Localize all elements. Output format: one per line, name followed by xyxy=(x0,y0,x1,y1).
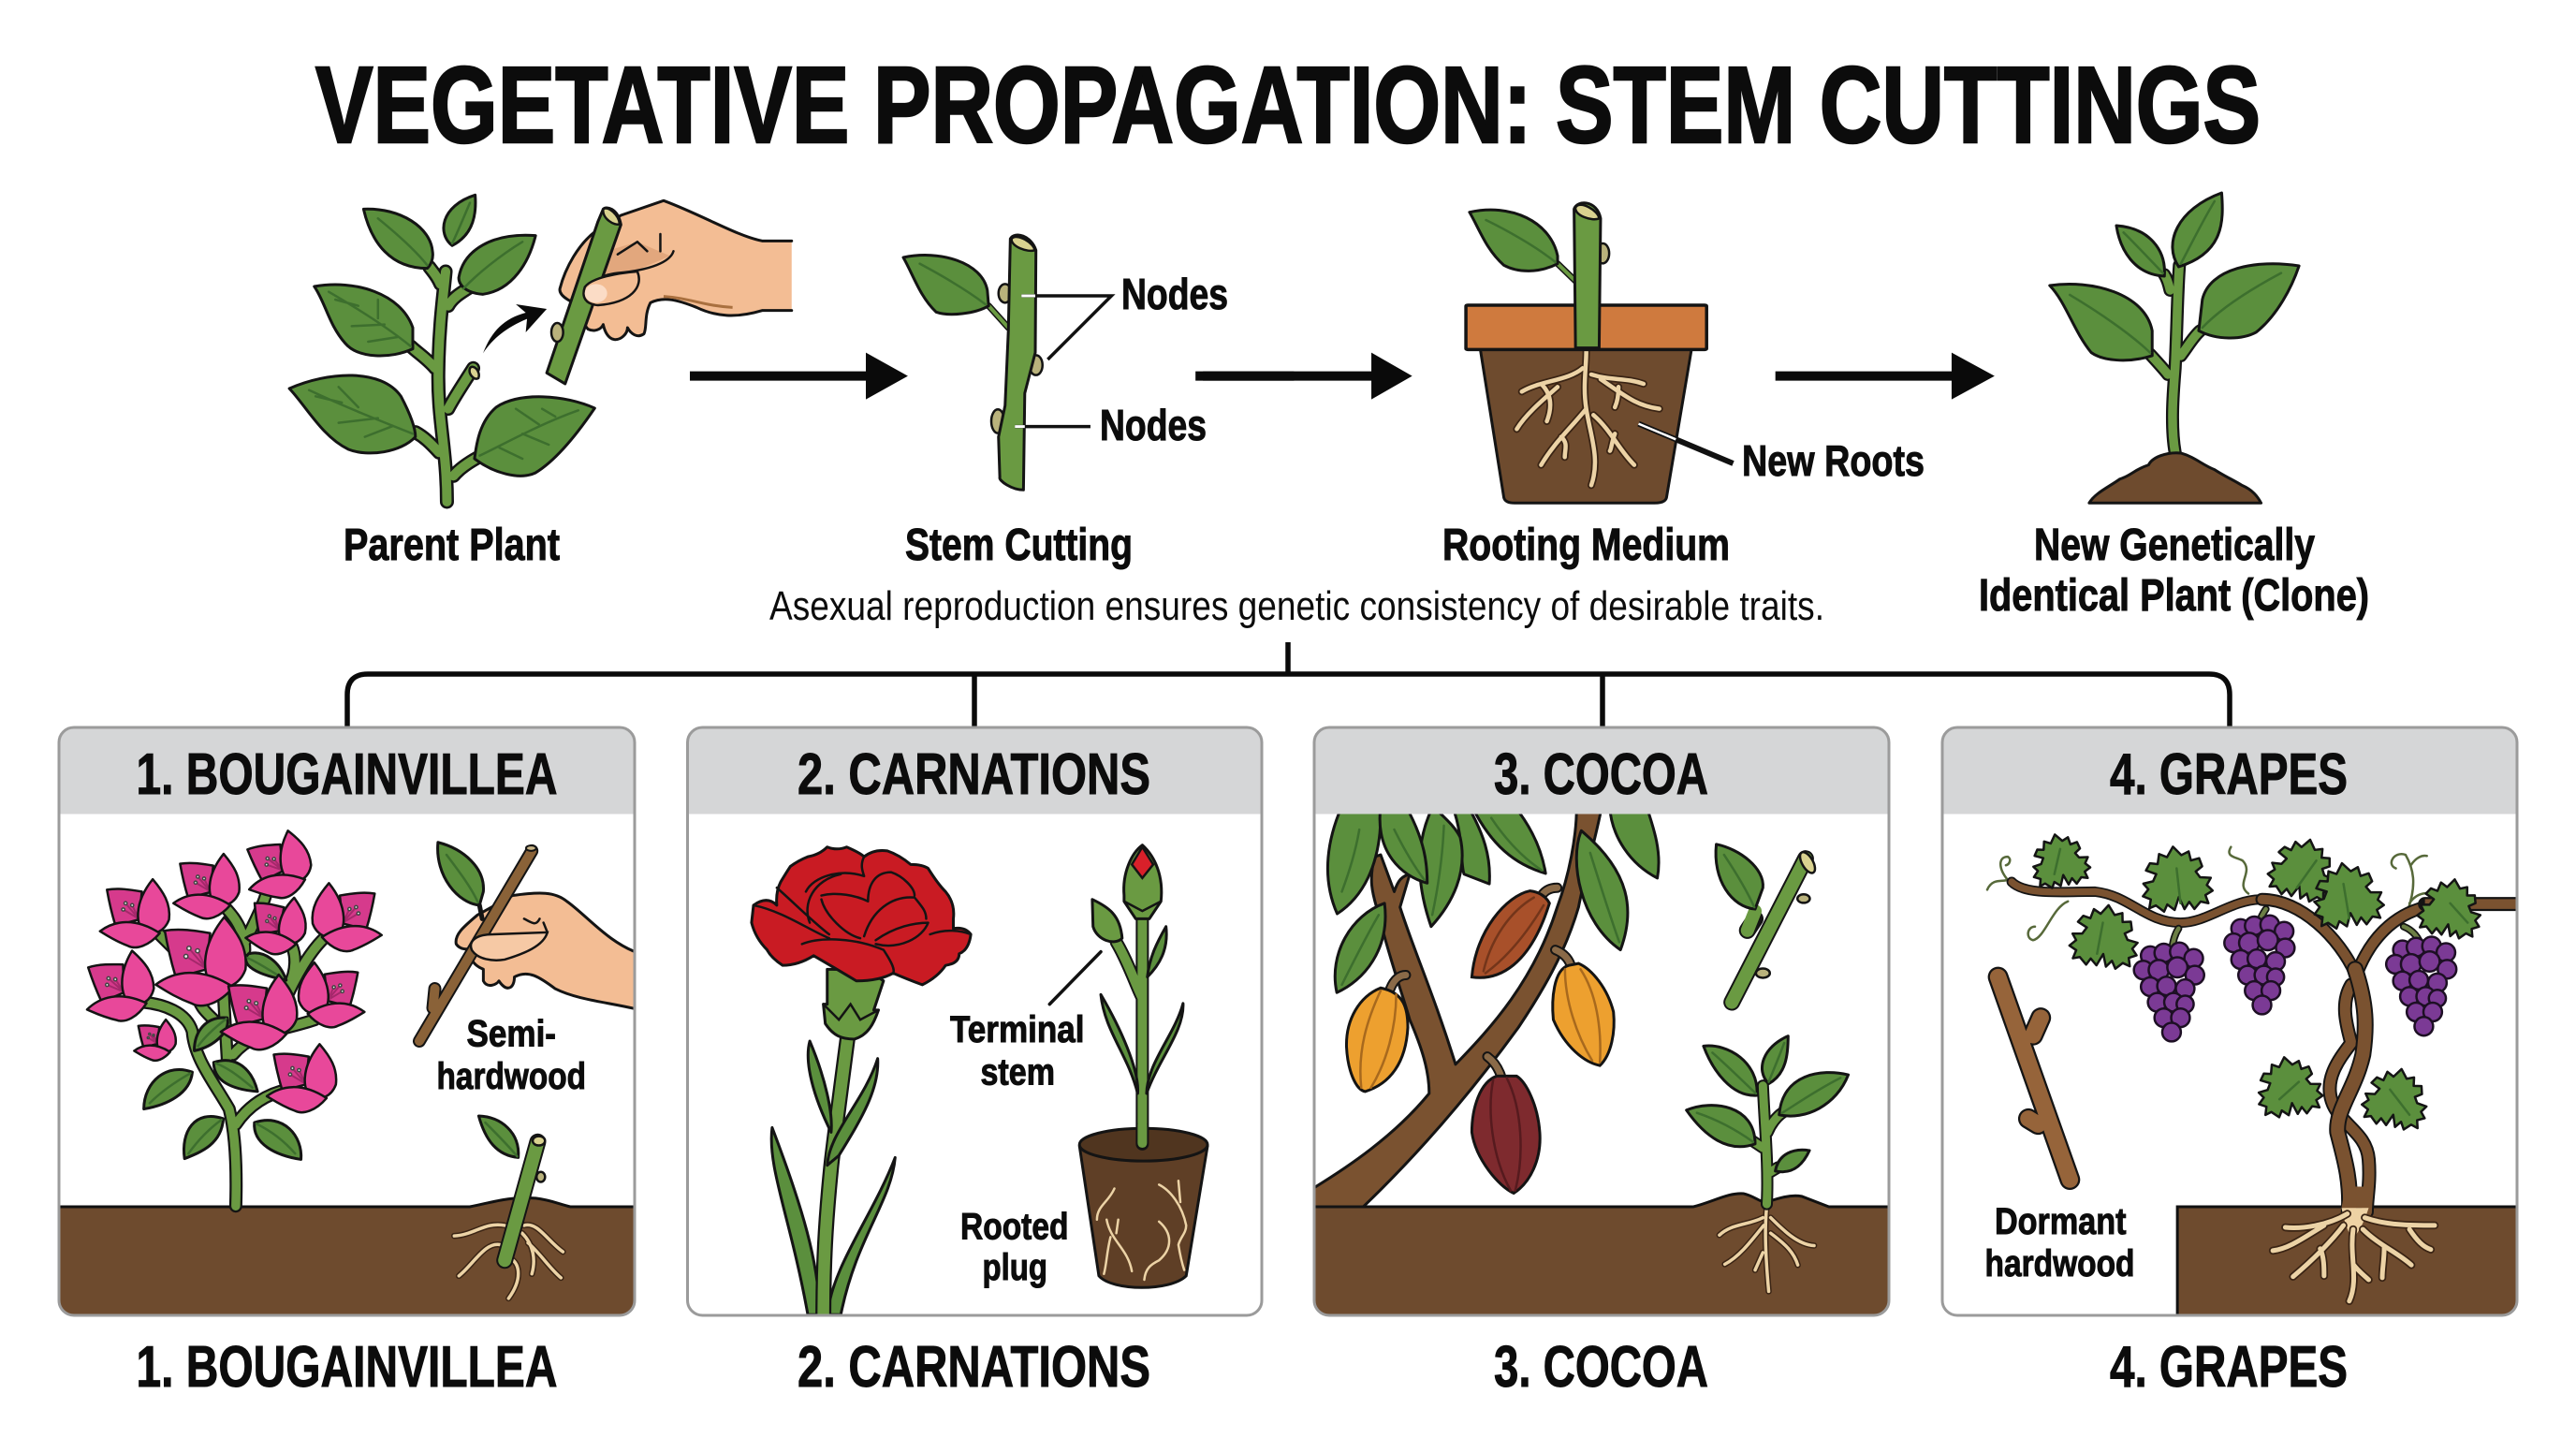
icon: carnation flower xyxy=(752,847,971,1320)
caption: grapes: 4. GRAPES xyxy=(2110,1335,2348,1400)
icon: new plant in soil xyxy=(2050,193,2299,503)
heading text: grapes: 4. GRAPES xyxy=(2110,742,2348,807)
label: new genetically identical plant: New Genetically xyxy=(2034,521,2315,570)
heading band: carnations xyxy=(687,727,1262,814)
label: rooted plug: plug xyxy=(983,1247,1047,1288)
label: new genetically identical plant xyxy=(1979,521,2369,621)
panel: grapes xyxy=(1942,727,2550,1343)
icon: parent plant xyxy=(289,195,594,502)
soil band xyxy=(1316,1192,1887,1314)
label: rooting medium: Rooting Medium xyxy=(1442,521,1730,570)
label: semi-hardwood xyxy=(436,1013,586,1097)
callout: terminal stem line xyxy=(1049,952,1101,1005)
label: parent plant: Parent Plant xyxy=(344,521,560,570)
icon: cocoa pods xyxy=(1346,888,1614,1194)
label: rooted plug xyxy=(960,1206,1069,1288)
step 1: parent plant and hand xyxy=(289,195,1294,502)
panel art: grapes xyxy=(1986,833,2516,1314)
icon: grape roots xyxy=(2273,1208,2435,1301)
label: dormant hardwood xyxy=(1984,1201,2134,1284)
label: terminal stem xyxy=(950,1009,1084,1093)
arrow: cutting to medium xyxy=(1195,372,1294,381)
panel art: cocoa xyxy=(1316,814,1887,1314)
panel: carnations xyxy=(687,727,1262,1320)
icon: cocoa seedling xyxy=(1687,1036,1849,1291)
step 3 and 4: pot and clone plant xyxy=(1203,193,2299,503)
connector bracket xyxy=(347,642,2230,727)
panel: cocoa xyxy=(1312,726,1891,1316)
icon: hand holding cutting xyxy=(547,200,792,384)
label: rooted plug: Rooted xyxy=(960,1206,1069,1247)
icon: tendrils xyxy=(1987,847,2437,940)
icon: grape vine trunk xyxy=(2012,882,2525,1211)
icon: bougainvillea plant xyxy=(80,828,382,1206)
soil block xyxy=(2175,1206,2516,1314)
icon: rooted plug xyxy=(1079,1124,1208,1287)
heading band: bougainvillea xyxy=(59,727,635,814)
heading text: bougainvillea: 1. BOUGAINVILLEA xyxy=(137,742,558,807)
label: dormant hardwood: Dormant xyxy=(1995,1201,2127,1242)
icon: terminal stem cutting xyxy=(1092,845,1183,1144)
panel art: carnations xyxy=(752,845,1208,1320)
label: semi-hardwood: Semi- xyxy=(466,1013,556,1054)
label: nodes top: Nodes xyxy=(1121,270,1228,318)
heading band: cocoa xyxy=(1314,727,1889,814)
callout: new roots line xyxy=(1639,424,1734,463)
panel art: bougainvillea xyxy=(47,828,667,1342)
label: terminal stem: stem xyxy=(981,1052,1055,1093)
subtitle text: Asexual reproduction ensures genetic consistency of desirable traits. xyxy=(769,583,1824,629)
arrow: head of second arrow xyxy=(1203,353,1412,400)
arrow: parent to cutting xyxy=(690,353,908,400)
heading text: cocoa: 3. COCOA xyxy=(1494,742,1708,807)
icon: cocoa tree branch xyxy=(1312,806,1602,1207)
label: dormant hardwood: hardwood xyxy=(1984,1243,2134,1284)
caption: bougainvillea: 1. BOUGAINVILLEA xyxy=(137,1335,558,1400)
label: nodes bottom: Nodes xyxy=(1100,401,1207,449)
icon: rooted cutting xyxy=(454,1116,563,1299)
icon: grape leaves xyxy=(2027,829,2486,1134)
icon: semi-hardwood cutting in hand xyxy=(419,843,640,1041)
icon: pot with rooting medium xyxy=(1466,203,1706,503)
callout: node lines xyxy=(1015,296,1111,427)
label: semi-hardwood: hardwood xyxy=(436,1056,586,1097)
caption: carnations: 2. CARNATIONS xyxy=(798,1335,1150,1400)
icon: dormant hardwood cutting xyxy=(1998,977,2070,1180)
label: new roots: New Roots xyxy=(1742,436,1925,485)
icon: cocoa leaves xyxy=(1327,806,1659,992)
arrow: curved arrow to cutting xyxy=(483,304,547,353)
label: stem cutting: Stem Cutting xyxy=(905,521,1133,570)
step labels xyxy=(344,270,2369,621)
icon: grape clusters xyxy=(2134,909,2456,1041)
label: new genetically identical plant: Identical Plant (Clone) xyxy=(1979,571,2369,621)
label: terminal stem: Terminal xyxy=(950,1009,1084,1050)
panel: bougainvillea xyxy=(58,726,637,1316)
soil band xyxy=(60,1196,633,1314)
heading text: carnations: 2. CARNATIONS xyxy=(798,742,1150,807)
icon: stem cutting xyxy=(903,235,1043,490)
caption: cocoa: 3. COCOA xyxy=(1494,1335,1708,1400)
icon: cocoa cutting xyxy=(1716,844,1818,1003)
heading band: grapes xyxy=(1942,727,2517,814)
arrow: medium to new plant xyxy=(1776,353,1995,400)
